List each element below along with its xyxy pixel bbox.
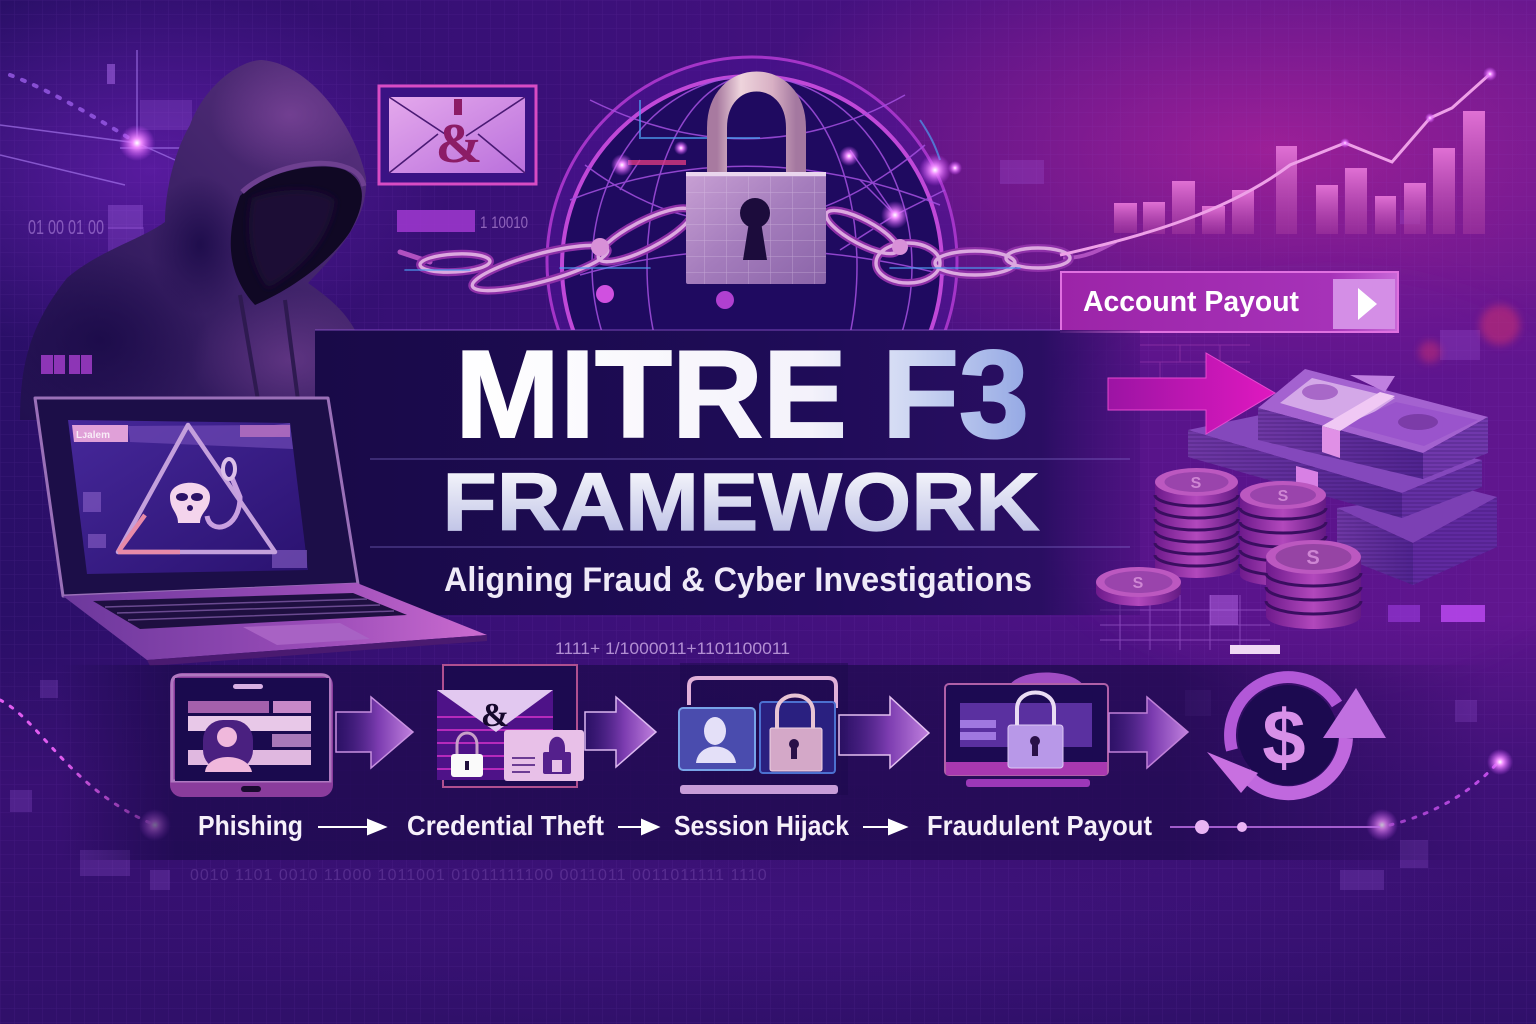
step 2 icon: envelope and locks <box>437 665 584 787</box>
account payout button: Account Payout <box>1083 286 1299 318</box>
top bundle <box>1258 369 1488 479</box>
middle bundle <box>1188 415 1482 518</box>
bar chart with trend line <box>1060 67 1497 255</box>
data bars near envelope <box>397 210 528 232</box>
account payout button <box>1061 272 1398 332</box>
single coin <box>1096 567 1181 606</box>
flow line with dots <box>1170 820 1380 834</box>
label: Phishing: Phishing <box>198 810 303 841</box>
padlock <box>686 82 826 284</box>
label: Session Hijack: Session Hijack <box>674 810 849 841</box>
magenta arrow <box>1108 353 1275 434</box>
stack 1: S <box>1191 475 1202 492</box>
binary strip <box>555 639 1280 658</box>
label: Credential Theft: Credential Theft <box>407 810 604 841</box>
step 2 icon: envelope and locks: & <box>481 697 509 734</box>
flow arrow b <box>618 820 658 834</box>
step 3 icon: identity card and lock <box>679 663 848 795</box>
step 5 icon: dollar cycle: $ <box>1262 693 1306 781</box>
step 4 icon: monitor with lock <box>945 672 1108 787</box>
background: 0010 1101 0010 11000 1011001 01011111100 0011011 0011011111 1110 <box>190 867 768 884</box>
chain <box>400 199 1115 300</box>
stack 2: S <box>1278 488 1289 505</box>
binary strip: 1111+ 1/1000011+1101100011 <box>555 639 790 658</box>
hooded figure <box>20 60 366 420</box>
stack 3: S <box>1306 547 1320 569</box>
title: FRAMEWORK: FRAMEWORK <box>442 457 1040 548</box>
flow arrow a <box>318 820 385 834</box>
flow arrow c <box>863 820 906 834</box>
network lines and glowing dots <box>0 50 1520 841</box>
arrow 4 <box>1109 697 1188 768</box>
arrow 1 <box>336 697 413 768</box>
title panel <box>315 326 1140 615</box>
title: MITRE F3: MITRE F3 <box>455 326 1029 464</box>
background: 01 00 01 00 <box>28 217 104 239</box>
stack 1 <box>1155 468 1238 578</box>
stack 2 <box>1240 481 1326 586</box>
laptop with phishing warning <box>35 398 487 666</box>
money stacks <box>1188 369 1497 585</box>
globe <box>547 57 962 467</box>
arrow 2 <box>585 697 656 767</box>
stack 3 <box>1266 540 1361 629</box>
bottom bundle <box>1337 490 1497 585</box>
coin stacks <box>1096 468 1361 629</box>
data bars near envelope: 1 10010 <box>480 213 528 232</box>
envelope icon: & <box>436 113 482 175</box>
step 5 icon: dollar cycle <box>1207 677 1386 793</box>
laptop with phishing warning: Lᴊalem <box>76 430 110 441</box>
step 1 icon: phishing screen <box>170 673 333 797</box>
label: Fraudulent Payout: Fraudulent Payout <box>927 810 1152 841</box>
single coin: S <box>1133 575 1144 592</box>
envelope icon <box>379 86 536 184</box>
process flow panel <box>60 663 1490 860</box>
arrow 3 <box>839 697 929 768</box>
subtitle: Aligning Fraud & Cyber Investigations <box>444 561 1032 599</box>
